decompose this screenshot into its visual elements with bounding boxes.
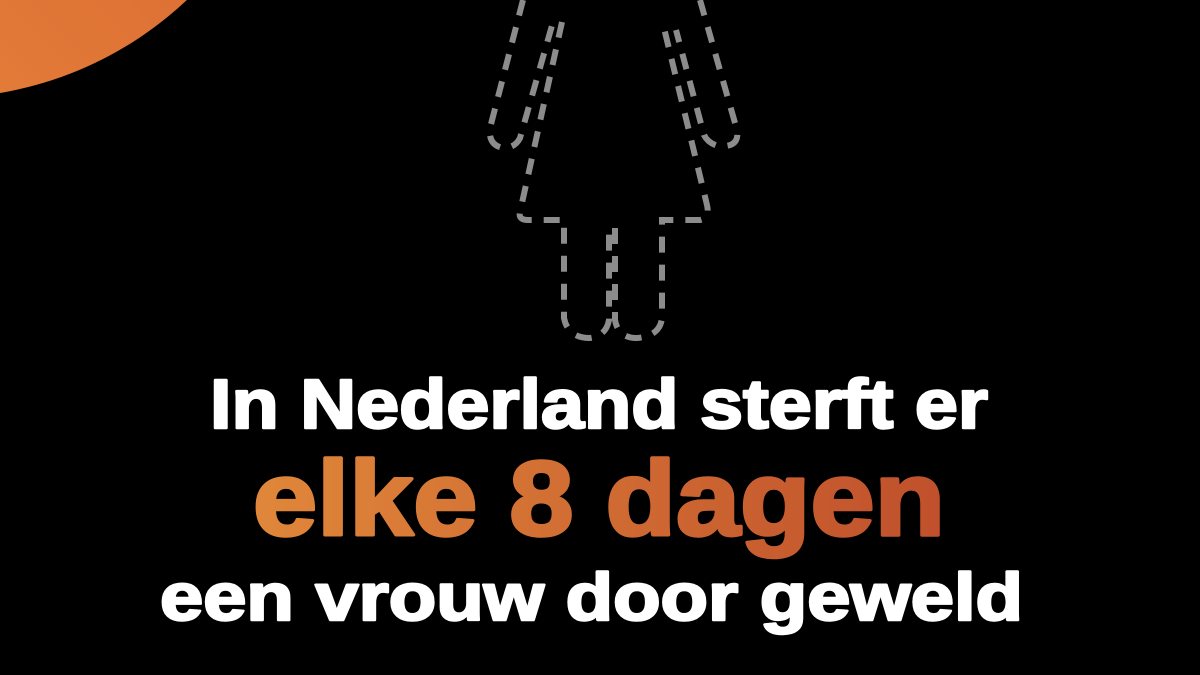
icon: dashed woman figure [490, 0, 737, 338]
title line 1: In Nederland sterft er [210, 365, 988, 443]
right leg / body right [615, 24, 708, 338]
title line 2 highlight: elke 8 dagen [253, 440, 945, 558]
left arm [490, 0, 553, 148]
right arm [676, 0, 737, 146]
title line 3: een vrouw door geweld [160, 560, 1023, 635]
orange circle decoration [0, 0, 300, 98]
body left [520, 22, 609, 338]
